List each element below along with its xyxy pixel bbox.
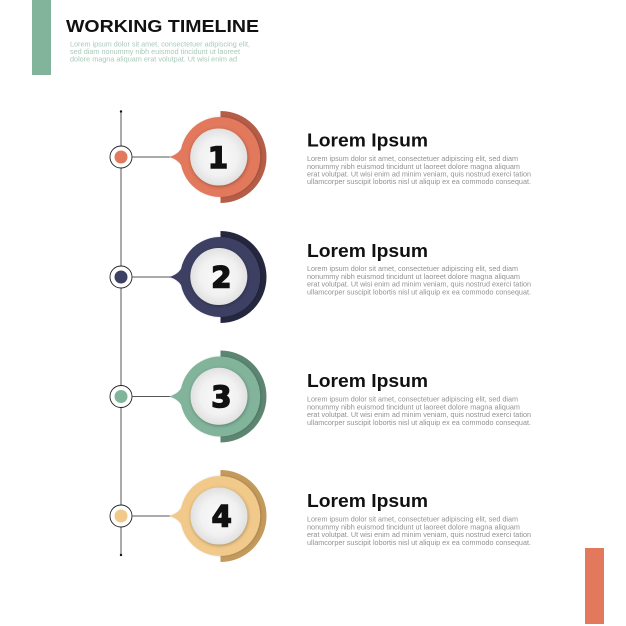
dark half ring 2 (220, 231, 266, 323)
body 1: nonummy nibh euismod tincidunt ut laoreet dolore magna aliquam (307, 162, 520, 171)
body 3: erat volutpat. Ut wisi enim ad minim veniam, quis nostrud exerci tation (307, 410, 531, 419)
body 1: Lorem ipsum dolor sit amet, consectetuer adipiscing elit, sed diam (307, 154, 518, 163)
subtitle text: sed diam nonummy nibh euismod tincidunt ut laoreet (70, 47, 240, 56)
body 2: Lorem ipsum dolor sit amet, consectetuer adipiscing elit, sed diam (307, 264, 518, 273)
body 2 (307, 264, 531, 296)
title: WORKING TIMELINE (66, 16, 259, 36)
number 2: 2 (211, 260, 231, 294)
heading 3: Lorem Ipsum (307, 370, 428, 391)
disc 2 (190, 248, 247, 305)
number 1: 1 (208, 141, 228, 175)
body 2: nonummy nibh euismod tincidunt ut laoreet dolore magna aliquam (307, 272, 520, 281)
subtitle text (70, 40, 250, 64)
body 1: erat volutpat. Ut wisi enim ad minim veniam, quis nostrud exerci tation (307, 170, 531, 178)
disc 4 (190, 488, 248, 544)
body 2: erat volutpat. Ut wisi enim ad minim veniam, quis nostrud exerci tation (307, 280, 531, 288)
dark half ring 4 (220, 470, 266, 562)
body 3 (307, 394, 531, 427)
body 4: Lorem ipsum dolor sit amet, consectetuer adipiscing elit, sed diam (307, 514, 518, 524)
heading 2: Lorem Ipsum (307, 240, 428, 261)
body 4: ullamcorper suscipit lobortis nisl ut aliquip ex ea commodo consequat. (307, 538, 531, 547)
number 4: 4 (212, 500, 232, 534)
heading 4: Lorem Ipsum (307, 490, 428, 511)
node 3 (110, 386, 132, 408)
body 4: erat volutpat. Ut wisi enim ad minim veniam, quis nostrud exerci tation (307, 530, 531, 539)
green header bar (32, 0, 51, 75)
body 1: ullamcorper suscipit lobortis nisl ut aliquip ex ea commodo consequat. (307, 177, 531, 186)
dark half ring 1 (220, 111, 266, 203)
coral corner bar (585, 548, 604, 624)
step 3 (110, 350, 531, 442)
subtitle text: dolore magna aliquam erat volutpat. Ut wisi enim ad (70, 54, 237, 64)
timeline axis (120, 110, 122, 556)
disc 1 (190, 128, 247, 186)
dark half ring 3 (220, 350, 266, 442)
number 3: 3 (211, 380, 231, 414)
body 2: ullamcorper suscipit lobortis nisl ut aliquip ex ea commodo consequat. (307, 288, 531, 296)
node 2 (110, 266, 132, 288)
body 4 (307, 514, 531, 547)
disc 3 (190, 368, 248, 425)
node 4 (110, 505, 132, 527)
badge 1 (169, 117, 260, 197)
body 1 (307, 154, 531, 186)
badge 2 (169, 237, 260, 317)
heading 1: Lorem Ipsum (307, 130, 428, 150)
body 3: ullamcorper suscipit lobortis nisl ut aliquip ex ea commodo consequat. (307, 418, 531, 427)
node 1 (110, 146, 132, 168)
badge 4 (169, 476, 260, 556)
body 4: nonummy nibh euismod tincidunt ut laoreet dolore magna aliquam (307, 522, 520, 532)
body 3: nonummy nibh euismod tincidunt ut laoreet dolore magna aliquam (307, 402, 520, 412)
badge 3 (169, 357, 260, 436)
step 2 (110, 231, 531, 323)
subtitle text: Lorem ipsum dolor sit amet, consectetuer adipiscing elit, (70, 40, 250, 48)
step 1 (110, 111, 531, 203)
body 3: Lorem ipsum dolor sit amet, consectetuer adipiscing elit, sed diam (307, 394, 518, 404)
step 4 (110, 470, 531, 562)
